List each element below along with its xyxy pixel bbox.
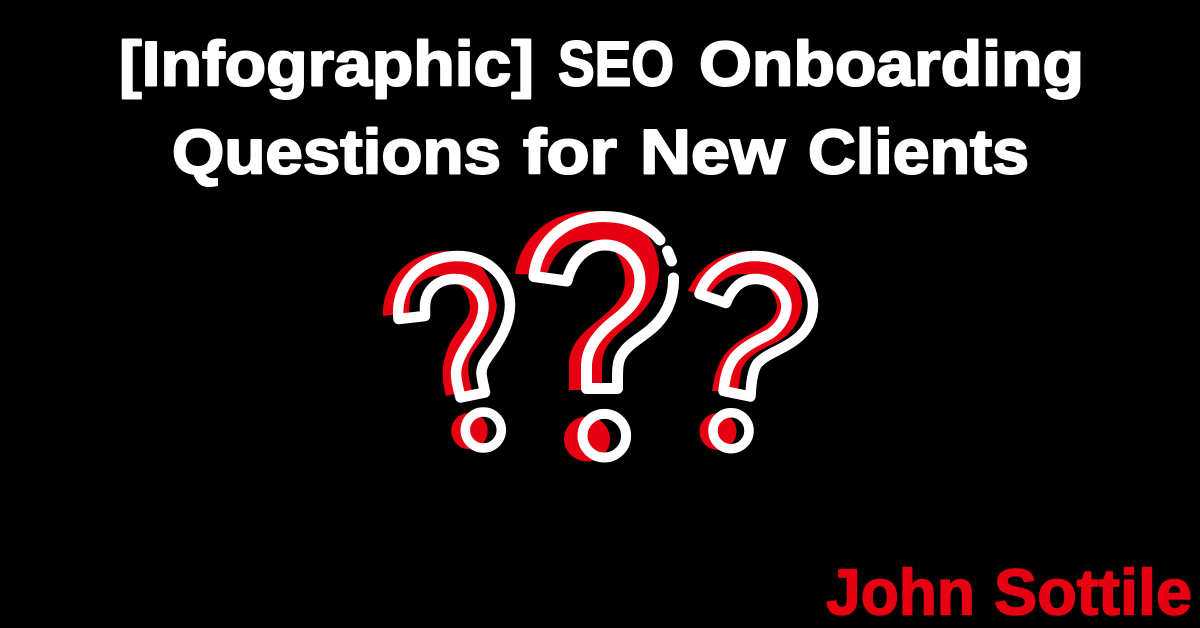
icon: right dot — [700, 413, 749, 450]
icon: centre question mark — [515, 211, 674, 462]
icon: centre dot — [564, 414, 626, 462]
title: [Infographic] — [119, 30, 534, 100]
brand name — [826, 556, 1192, 628]
icon: left question mark — [383, 251, 510, 449]
title: Onboarding — [699, 30, 1084, 100]
title: SEO — [558, 30, 674, 100]
brand name: John — [826, 556, 975, 628]
title: Questions — [172, 118, 501, 188]
title: Clients — [808, 118, 1029, 188]
icon: right question mark — [688, 251, 813, 450]
brand name: Sottile — [994, 556, 1192, 628]
icon: centre dash accent — [668, 251, 672, 261]
title — [119, 30, 1084, 188]
title: for — [523, 118, 617, 188]
icon: left dot — [451, 412, 501, 449]
title: New — [640, 118, 786, 188]
